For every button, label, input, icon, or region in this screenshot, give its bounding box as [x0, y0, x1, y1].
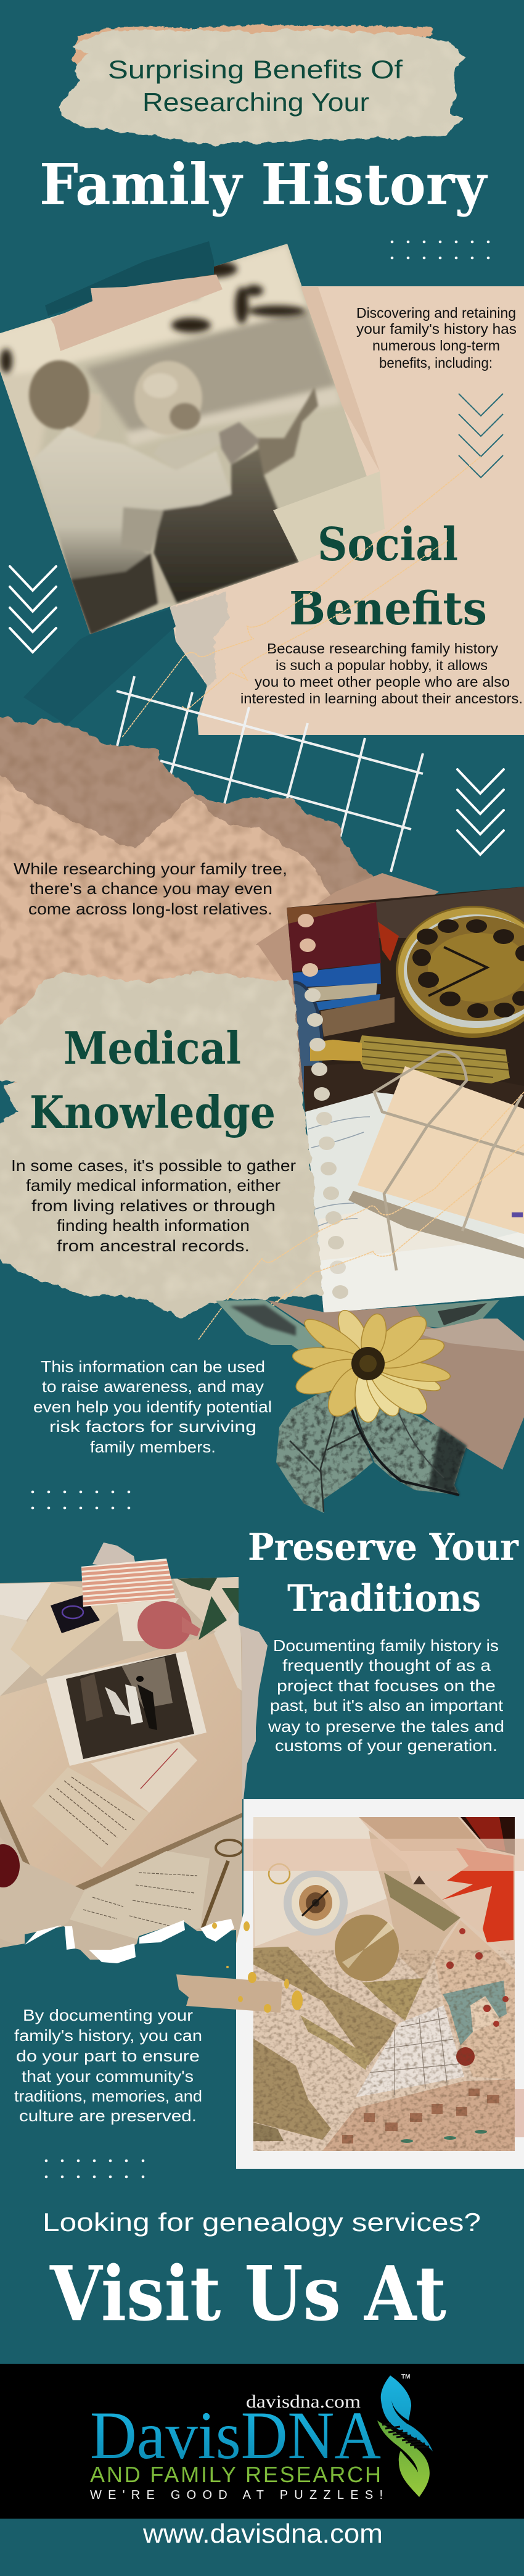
information text: even help you identify potential [33, 1398, 272, 1416]
traditions text: project that focuses on the [277, 1676, 496, 1695]
chevrons white left [10, 566, 56, 652]
dot grid top [391, 241, 489, 259]
left person head [29, 360, 89, 429]
ribbon [442, 1817, 515, 1942]
left person shirt [33, 427, 231, 579]
map sheet left [253, 1947, 424, 2151]
social benefits text [240, 640, 523, 706]
light translucent corner on photo [273, 471, 385, 562]
logo url: davisdna.com [246, 2392, 361, 2412]
flower [292, 1306, 452, 1423]
torn grey paper strip [170, 592, 229, 685]
logo tagline: WE'RE GOOD AT PUZZLES! [90, 2488, 383, 2502]
documenting text: By documenting your [23, 2006, 193, 2024]
compass [269, 1864, 348, 1936]
inkwell [51, 1595, 100, 1633]
heading: medical knowledge: Medical [63, 1022, 241, 1074]
squiggle upper [122, 457, 481, 737]
title line 1: Surprising Benefits Of [108, 55, 403, 84]
panel: brown torn paper [0, 717, 444, 1092]
key [202, 1840, 243, 1929]
documenting text: that your community's [22, 2067, 194, 2085]
gap [151, 553, 176, 603]
social benefits text: Because researching family history [267, 640, 499, 656]
pink tape right [515, 2089, 524, 2137]
photo: letters and wedding picture [0, 1573, 244, 1962]
while researching text: While researching your family tree, [14, 859, 287, 878]
traditions text: customs of your generation. [275, 1736, 497, 1755]
torn paper above tape [92, 1543, 137, 1570]
heading: medical knowledge: Knowledge [30, 1086, 276, 1138]
upper leaves [216, 1300, 499, 1362]
letter bundle [348, 1191, 524, 1259]
social benefits text: interested in learning about their ancestors. [240, 690, 523, 706]
translucent paper strip on right of photo [301, 287, 380, 471]
tan tape [176, 1974, 282, 2013]
book [0, 1633, 242, 1903]
clock [396, 906, 524, 1038]
heading: social benefits: Social [317, 518, 458, 571]
map sheet right [435, 1920, 515, 2079]
while researching text [14, 859, 287, 918]
white grid [117, 676, 423, 872]
right person head [134, 361, 202, 435]
panel: grey white frame [236, 1799, 524, 2169]
traditions text: past, but it's also an important [270, 1696, 504, 1715]
wax letter [0, 1837, 84, 1947]
wedding photo [46, 1651, 207, 1766]
letters base [305, 1092, 524, 1314]
documenting text [14, 2006, 202, 2125]
dark tape below photo [23, 609, 176, 725]
documenting text: family's history, you can [14, 2026, 202, 2045]
main heading: Family History [39, 151, 488, 218]
intro text: benefits, including: [379, 355, 493, 371]
photo: clock books letters [266, 882, 524, 1314]
website url: www.davisdna.com [142, 2519, 383, 2549]
chevrons teal [459, 394, 503, 478]
right person collar [154, 430, 221, 470]
trademark: TM [401, 2374, 410, 2380]
medical text: from living relatives or through [31, 1196, 276, 1215]
panel: medical knowledge torn paper [0, 971, 322, 1318]
table top [359, 1817, 515, 1960]
paper: title scrap orange backing [73, 25, 432, 68]
panel: light brown torn paper [0, 765, 358, 1089]
intro text [356, 305, 517, 371]
panel: teal edge with torn white scraps [0, 1919, 236, 2169]
punched holes [298, 914, 348, 1299]
photo: elderly couple [0, 241, 395, 636]
information text: family members. [90, 1438, 216, 1456]
map sheet bottom [322, 2079, 515, 2151]
left person lower body [70, 553, 158, 636]
traditions text [268, 1636, 504, 1755]
intro text: numerous long-term [372, 338, 500, 354]
heading: medical knowledge [30, 1022, 276, 1138]
open letter [70, 1851, 210, 1939]
medical text: In some cases, it's possible to gather [11, 1156, 296, 1175]
medical text [11, 1156, 296, 1255]
brown paper overlay behind photo [257, 873, 439, 1000]
documenting text: traditions, memories, and [14, 2087, 202, 2105]
map texture [253, 1950, 515, 2151]
information text: risk factors for surviving [49, 1417, 256, 1436]
heading: preserve your traditions [248, 1526, 519, 1620]
medical text: finding health information [57, 1216, 250, 1235]
information text: to raise awareness, and may [42, 1377, 264, 1396]
teal notch left [0, 1080, 17, 1134]
while researching text: there's a chance you may even [30, 879, 272, 898]
call to action question: Looking for genealogy services? [43, 2208, 481, 2237]
panel: peach paper social benefits [170, 286, 524, 735]
logo helix leaf icon [377, 2375, 433, 2497]
squiggle lower and while text [199, 1092, 524, 1340]
information text: This information can be used [41, 1357, 265, 1376]
dot grid bottom [45, 2160, 144, 2178]
sleeve [121, 507, 163, 553]
visit us at: Visit Us At [49, 2249, 446, 2338]
medical text: family medical information, either [26, 1176, 280, 1195]
rose [137, 1577, 239, 1649]
brass rod [310, 1035, 510, 1083]
heading: preserve your traditions: Traditions [287, 1577, 481, 1620]
right person raised arm [256, 387, 318, 475]
dot grid middle [31, 1491, 130, 1509]
gold blots [212, 1921, 303, 2013]
information text [33, 1357, 272, 1456]
documenting text: culture are preserved. [19, 2106, 197, 2125]
logo subtitle: AND FAMILY RESEARCH [90, 2462, 381, 2487]
heading: social benefits: Benefits [289, 582, 487, 636]
brown paper behind flower [267, 1300, 524, 1470]
right person body [154, 449, 299, 603]
peach tape on photo [51, 275, 223, 351]
envelope [253, 1817, 390, 1947]
hand on shoulder [219, 422, 260, 465]
light torn strip [409, 1319, 524, 1351]
traditions text: frequently thought of as a [282, 1656, 491, 1675]
photo: compass and map [253, 1817, 515, 2151]
social benefits text: is such a popular hobby, it allows [276, 657, 488, 673]
social benefits text: you to meet other people who are also [255, 674, 510, 690]
traditions text: Documenting family history is [273, 1636, 499, 1655]
logo band [0, 2364, 524, 2519]
logo name: DavisDNA [90, 2398, 381, 2473]
paper: title scrap [59, 30, 466, 144]
postcard [91, 1742, 197, 1813]
dark tape above photo [45, 241, 214, 316]
striped washi tape [80, 1555, 179, 1610]
medical text: from ancestral records. [57, 1236, 250, 1255]
neck [74, 395, 99, 436]
compass lid [335, 1915, 399, 1981]
chevrons white right [457, 769, 504, 855]
heading: social benefits [289, 518, 487, 636]
intro text: your family's history has [356, 321, 517, 337]
peach tape across map [244, 1839, 524, 1871]
city map [356, 2005, 464, 2097]
lower leaves [276, 1392, 469, 1513]
map sheet upper [369, 1830, 461, 1981]
intro text: Discovering and retaining [356, 305, 516, 321]
title line 2: Researching Your [142, 88, 369, 117]
while researching text: come across long-lost relatives. [28, 900, 272, 918]
documenting text: do your part to ensure [16, 2047, 200, 2065]
torn beige strip [239, 1625, 268, 1799]
traditions text: way to preserve the tales and [268, 1717, 504, 1736]
